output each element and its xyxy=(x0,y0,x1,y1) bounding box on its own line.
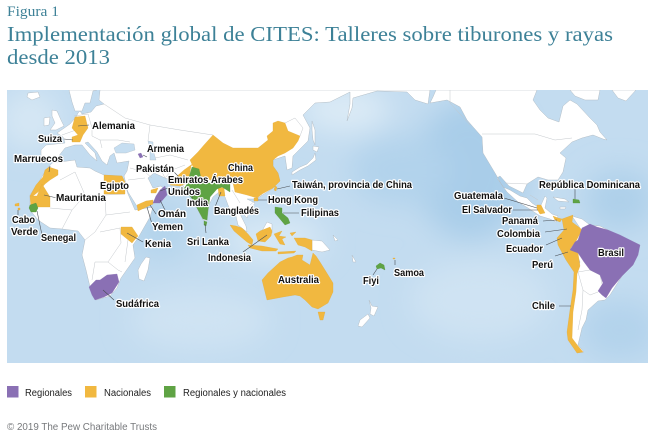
land: Africa xyxy=(30,160,153,300)
Germany and Switzerland xyxy=(72,116,88,142)
land: Southeast Asia islands xyxy=(262,222,356,262)
country labels: Mauritania xyxy=(56,193,106,204)
UAE xyxy=(151,188,158,193)
Australia xyxy=(262,253,333,309)
figure label: Figura 1 xyxy=(7,4,59,20)
land: New Zealand xyxy=(358,300,378,327)
country labels: Senegal xyxy=(41,233,76,244)
Oman xyxy=(153,186,167,203)
legend: Nacionales xyxy=(85,386,151,399)
country labels xyxy=(11,121,640,312)
country labels: Australia xyxy=(278,275,319,286)
country labels: Omán xyxy=(158,209,186,220)
inland seas xyxy=(114,141,156,160)
country labels: Perú xyxy=(532,260,553,271)
Indonesia xyxy=(230,225,312,254)
Dominican Republic xyxy=(573,199,580,203)
country borders xyxy=(50,90,602,330)
country labels: Unidos xyxy=(168,187,200,198)
India xyxy=(182,167,230,220)
Guatemala and El Salvador xyxy=(537,205,545,214)
country labels: Indonesia xyxy=(208,253,251,264)
Cape Verde xyxy=(15,203,20,210)
China xyxy=(190,121,300,198)
title: desde 2013 xyxy=(7,45,110,69)
Colombia, Ecuador, Peru, Chile xyxy=(557,215,583,353)
country labels: República Dominicana xyxy=(539,180,640,191)
country labels: Marruecos xyxy=(14,154,63,165)
ocean background xyxy=(0,88,650,363)
country labels: Armenia xyxy=(147,144,184,155)
Tasmania xyxy=(318,312,325,320)
Mauritania xyxy=(30,184,50,207)
country labels: Sudáfrica xyxy=(116,299,159,310)
world map xyxy=(0,88,650,363)
Panama xyxy=(553,216,562,222)
Armenia xyxy=(138,153,143,158)
country labels: Colombia xyxy=(497,229,540,240)
country labels: Verde xyxy=(11,227,38,238)
legend xyxy=(7,386,286,399)
Hong Kong xyxy=(254,198,258,201)
country labels: Egipto xyxy=(100,181,129,192)
copyright: © 2019 The Pew Charitable Trusts xyxy=(7,422,157,433)
country labels: Yemen xyxy=(152,222,183,233)
legend: Regionales y nacionales: Regionales y nacionales xyxy=(183,388,286,399)
country labels: Alemania xyxy=(92,121,135,132)
Regionales y nacionales countries xyxy=(29,167,580,270)
Nacionales countries xyxy=(15,116,583,353)
land: Japan and Sakhalin xyxy=(292,121,319,175)
Philippines xyxy=(275,207,290,225)
country labels: Hong Kong xyxy=(268,195,318,206)
country labels: Suiza xyxy=(38,134,62,145)
country labels: Chile xyxy=(532,301,555,312)
land: Eurasia xyxy=(41,90,430,232)
country labels: Pakistán xyxy=(136,164,174,175)
land: British Isles and Iceland xyxy=(27,92,64,130)
Taiwan xyxy=(274,186,277,191)
country labels: Filipinas xyxy=(301,208,339,219)
land: South America xyxy=(568,216,640,353)
country labels: Taiwán, provincia de China xyxy=(292,180,412,191)
land: Caribbean xyxy=(553,197,569,209)
Regionales countries xyxy=(89,153,640,300)
leader lines xyxy=(18,125,575,306)
Morocco xyxy=(30,167,58,196)
country labels: Ecuador xyxy=(506,244,543,255)
land: Madagascar xyxy=(138,257,150,281)
legend: Regionales xyxy=(7,386,72,399)
legend: Regionales: Regionales xyxy=(25,388,72,399)
country labels: China xyxy=(228,163,253,174)
Brazil xyxy=(570,224,640,298)
Samoa xyxy=(393,258,395,259)
Pakistan xyxy=(170,164,192,186)
Senegal xyxy=(29,203,38,212)
country labels: India xyxy=(187,198,208,209)
legend: Nacionales: Nacionales xyxy=(104,388,151,399)
Egypt xyxy=(104,175,125,194)
Bangladesh xyxy=(218,187,225,196)
country labels: Emiratos Árabes xyxy=(168,173,243,186)
country labels: Bangladés xyxy=(214,206,259,217)
country labels: Samoa xyxy=(394,268,424,279)
Yemen xyxy=(137,200,153,211)
country labels: Fiyi xyxy=(363,276,379,287)
land: Scandinavia xyxy=(69,90,97,111)
title xyxy=(7,22,613,69)
country labels: Brasil xyxy=(598,248,624,259)
Sri Lanka xyxy=(204,221,207,226)
legend: Regionales y nacionales xyxy=(164,386,286,399)
land: Arctic Canada and Greenland xyxy=(570,90,636,101)
Fiji xyxy=(376,263,385,270)
country labels: El Salvador xyxy=(462,205,512,216)
South Africa xyxy=(89,274,119,300)
country labels: Cabo xyxy=(12,215,35,226)
Kenya xyxy=(121,227,138,243)
land: North America xyxy=(430,90,607,222)
country labels: Panamá xyxy=(502,216,538,227)
country labels: Sri Lanka xyxy=(187,237,229,248)
country labels: Guatemala xyxy=(454,191,503,202)
country labels: Kenia xyxy=(145,239,171,250)
title: Implementación global de CITES: Talleres sobre tiburones y rayas xyxy=(7,22,613,46)
